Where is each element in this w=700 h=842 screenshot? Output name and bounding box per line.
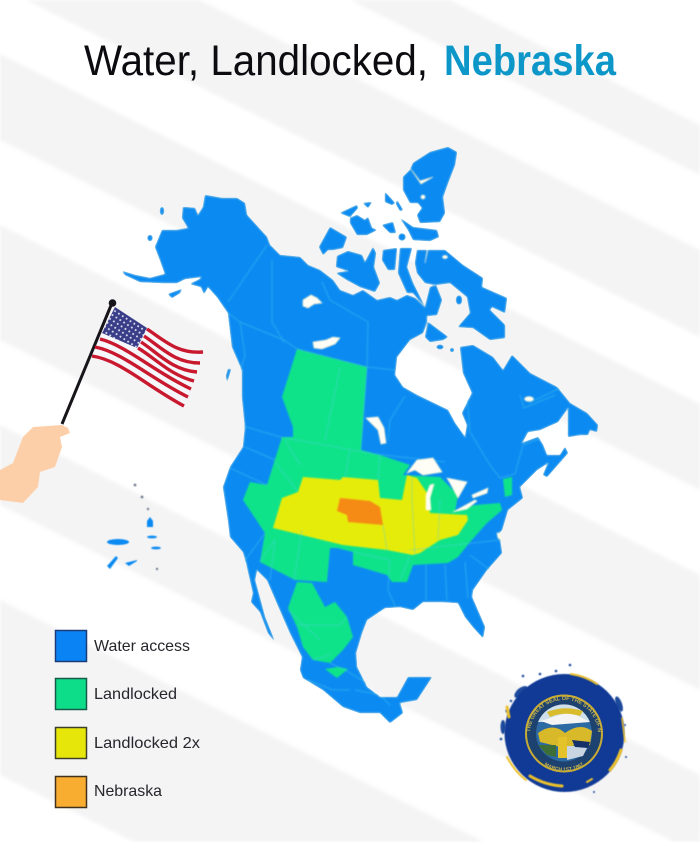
map: lakes and inland water [303, 168, 534, 540]
islands: Hawaii region [107, 484, 161, 570]
map: North America [122, 147, 598, 723]
map: water access landmass [122, 147, 598, 723]
title: Water, Landlocked, [84, 37, 428, 85]
map: landlocked states and provinces [243, 349, 512, 678]
hand holding flag [0, 299, 203, 503]
seal: paint splashes [500, 664, 627, 793]
map: Alaska and Pacific islands [148, 207, 231, 382]
legend: landlocked [56, 678, 177, 710]
legend: water access: Water access [94, 638, 190, 655]
seal: emblem: MARCH 1ST 1867 [544, 762, 582, 771]
icon: flag pole [62, 299, 116, 424]
map: arctic islands [319, 147, 507, 352]
legend: Nebraska: Nebraska [94, 783, 162, 800]
legend: landlocked 2x [56, 728, 200, 758]
legend: water access [56, 630, 190, 662]
icon: hand [0, 425, 70, 503]
seal: yellow paint streaks [507, 674, 625, 786]
legend: landlocked: Landlocked [94, 686, 177, 703]
legend [56, 630, 200, 808]
map: Nebraska [337, 498, 383, 525]
legend: landlocked 2x: Landlocked 2x [94, 735, 200, 752]
seal: emblem: THE GREAT SEAL OF THE STATE OF NEBRASKA [526, 696, 602, 732]
title: Nebraska [444, 37, 617, 85]
legend: Nebraska [56, 776, 162, 808]
icon: US flag [92, 307, 203, 406]
seal: blue disc [504, 674, 624, 792]
seal: emblem [525, 694, 603, 772]
map: doubly landlocked states [273, 475, 468, 555]
title [84, 37, 617, 85]
map: state and province borders [228, 245, 560, 705]
